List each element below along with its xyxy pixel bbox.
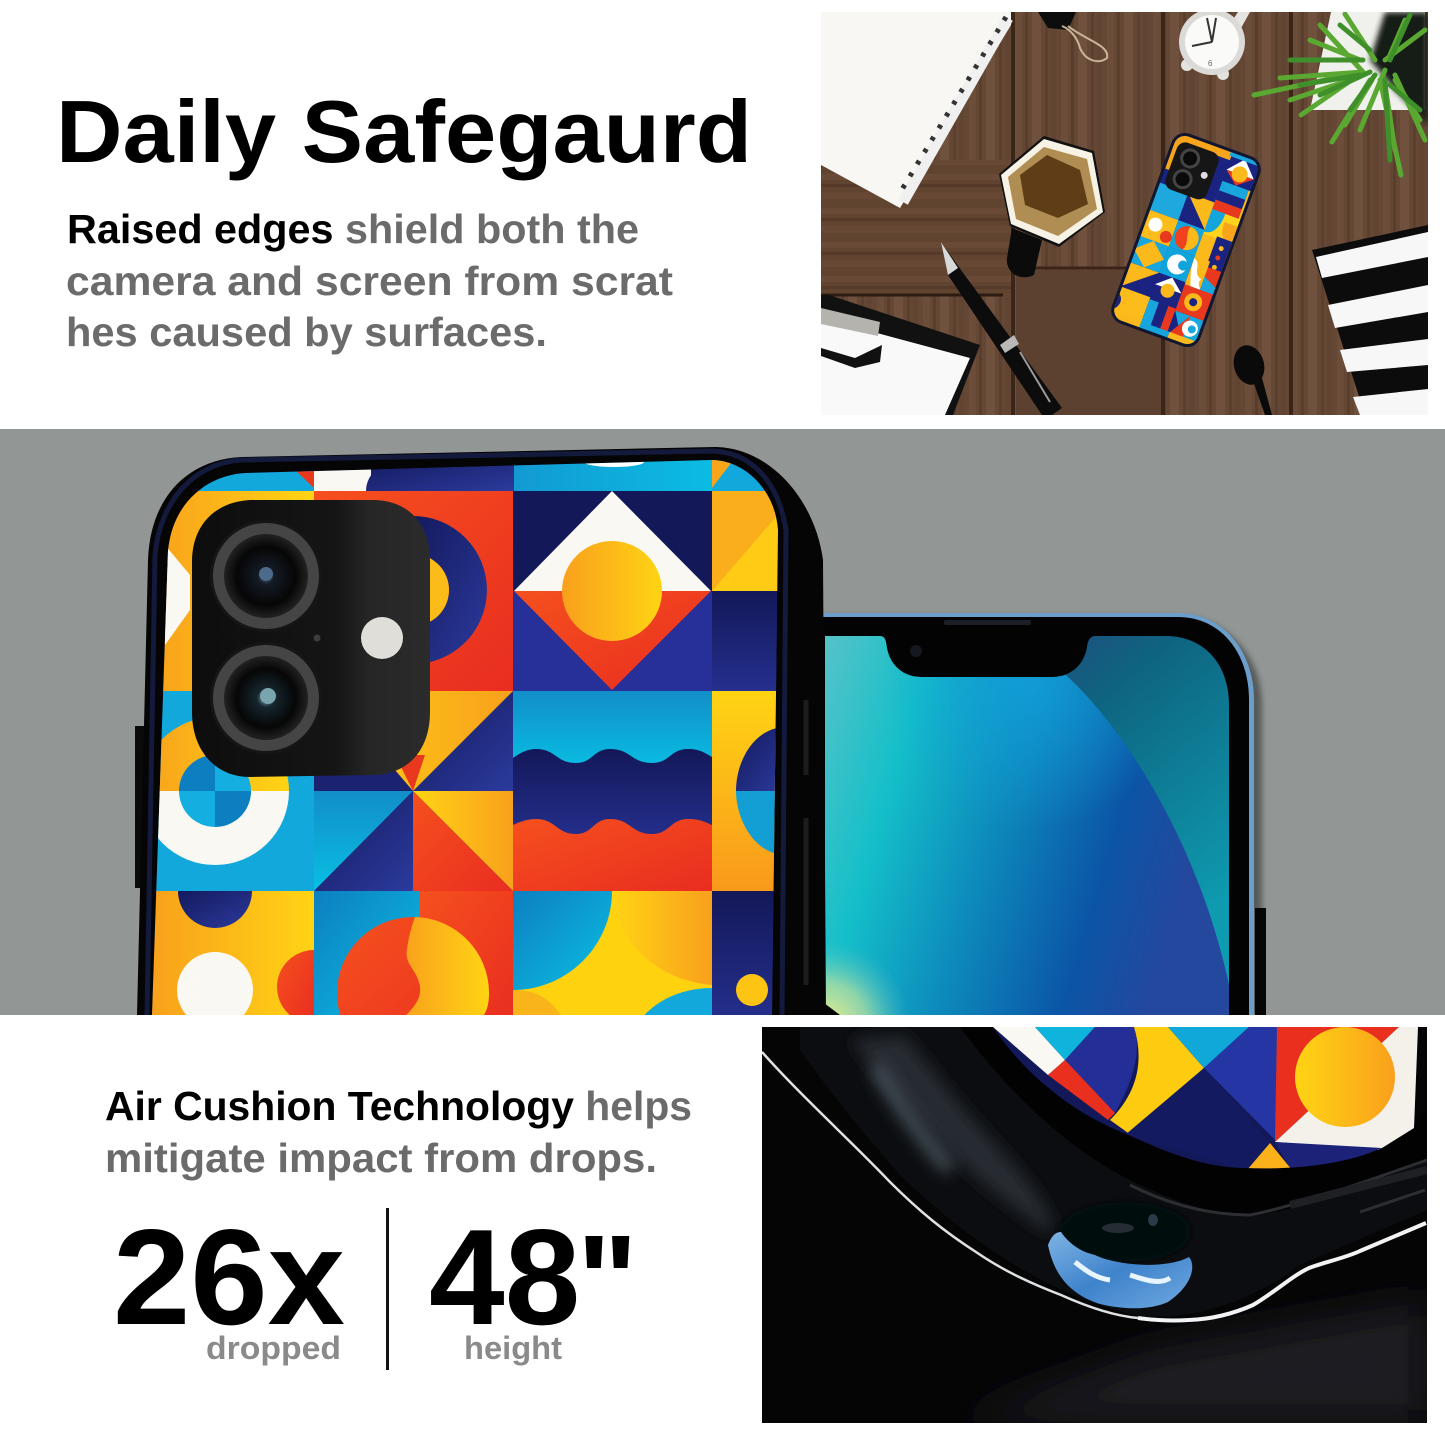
case bumper sheen xyxy=(850,1035,1053,1235)
top row xyxy=(198,471,315,491)
text block: raised edges: camera and screen from scrat xyxy=(66,258,673,304)
speaker xyxy=(944,620,1031,625)
black inner lip around art xyxy=(960,1027,1427,1215)
text block: air cushion: Air Cushion Technology helps xyxy=(105,1083,692,1129)
binder clip xyxy=(1038,12,1107,61)
coffee cup xyxy=(999,136,1105,277)
tile: ring on red xyxy=(314,491,513,691)
stat divider xyxy=(386,1208,389,1370)
ground shadow xyxy=(950,1300,1427,1423)
tile: bottom quarters xyxy=(513,891,712,1021)
row 2 xyxy=(1139,209,1178,246)
screen wallpaper xyxy=(825,630,1229,1015)
tile: orange left xyxy=(150,491,315,691)
clock: 6 xyxy=(1208,59,1213,68)
air cushion dome xyxy=(1059,1202,1191,1262)
gray band xyxy=(0,429,1445,1015)
clipboard xyxy=(821,295,980,415)
bumper gloss lines xyxy=(1130,1160,1427,1215)
row 6 xyxy=(1114,310,1142,328)
flash xyxy=(361,617,403,659)
text block: air cushion: mitigate impact from drops. xyxy=(105,1135,657,1181)
phone front: blue iPhone xyxy=(820,613,1266,1015)
mini camera xyxy=(1165,142,1219,200)
stat: 26x dropped: dropped xyxy=(206,1330,341,1366)
stat: 48 inches height: " xyxy=(577,1209,638,1352)
clock xyxy=(1179,9,1250,80)
photo: desk flat lay xyxy=(821,9,1428,415)
row 1 xyxy=(1213,181,1249,217)
text block: raised edges: hes caused by surfaces. xyxy=(66,309,547,355)
striped notebook xyxy=(1312,225,1428,415)
lens: lower xyxy=(213,645,319,751)
row 3 xyxy=(1129,236,1169,273)
macro case pattern xyxy=(990,1027,1420,1172)
text block: air cushion xyxy=(105,1083,692,1181)
tile: diamond xyxy=(513,491,712,591)
front camera xyxy=(910,645,922,657)
text block: raised edges: Raised edges shield both the xyxy=(67,206,639,252)
case bumper body xyxy=(800,1027,1427,1317)
case artwork xyxy=(152,460,778,1015)
plant xyxy=(1254,12,1428,175)
row 5 xyxy=(1111,286,1150,322)
tile: bottom yin yang xyxy=(314,891,420,1021)
lens: upper xyxy=(213,523,319,629)
tile: bottom left xyxy=(150,891,315,1021)
photo: air cushion corner macro xyxy=(762,1027,1427,1423)
text block: raised edges xyxy=(66,206,673,355)
mini phone with case xyxy=(1107,129,1266,352)
stat: 26x dropped: 26x xyxy=(113,1201,345,1353)
tile: triangles xyxy=(396,691,513,791)
camera module xyxy=(192,500,430,777)
row 4 xyxy=(1122,262,1159,287)
row 0 xyxy=(1176,136,1233,160)
title: Daily Safegaurd xyxy=(56,82,752,181)
phone back: patterned case xyxy=(135,447,826,1069)
air cushion bubble xyxy=(1048,1232,1192,1308)
tile: upper right xyxy=(712,491,782,591)
tile: right half circle xyxy=(712,691,782,891)
tile: left ring row xyxy=(150,691,315,891)
notebook xyxy=(821,12,1011,208)
tile: waves xyxy=(513,691,712,771)
spoon xyxy=(1234,345,1272,415)
stat: 48 inches height xyxy=(429,1201,638,1366)
stat: 48 inches height: height xyxy=(464,1330,562,1366)
pen xyxy=(941,242,1062,415)
stat: 48 inches height: 48 xyxy=(429,1201,580,1353)
